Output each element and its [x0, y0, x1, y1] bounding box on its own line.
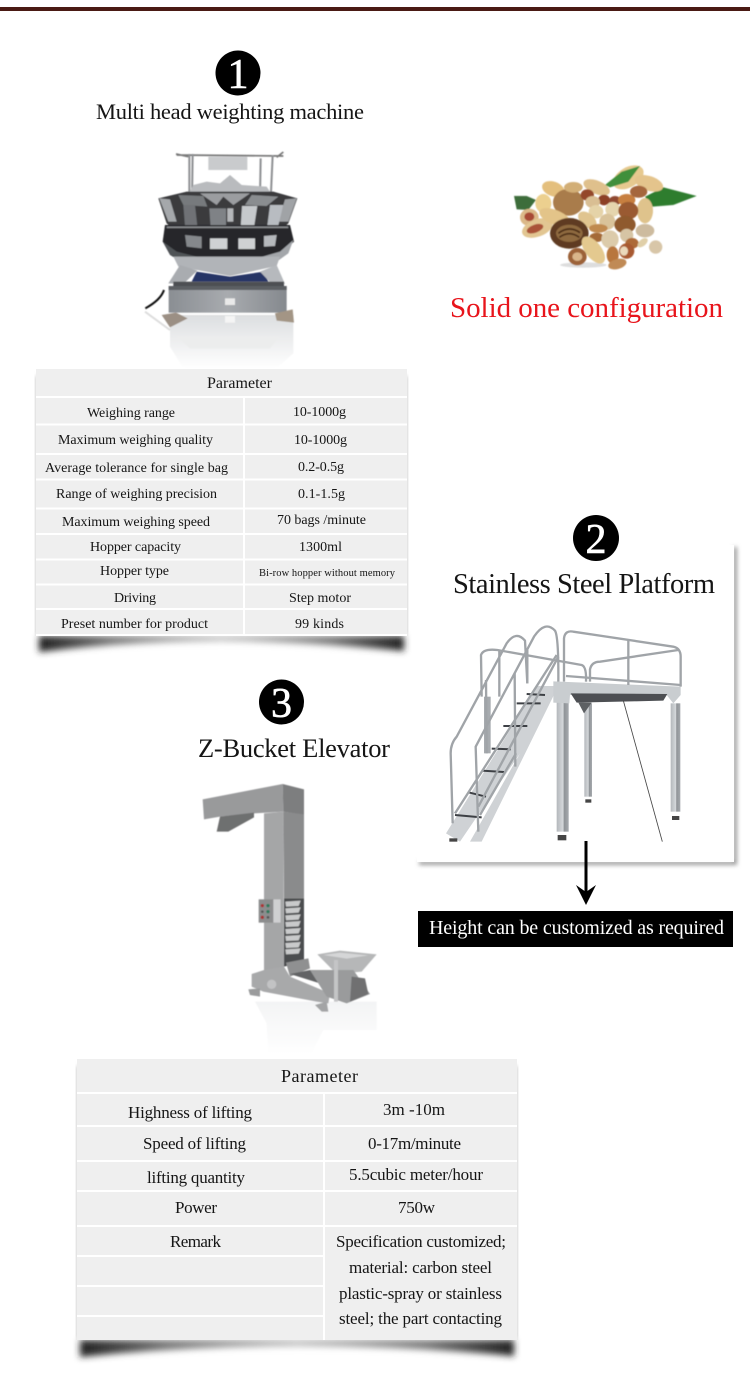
- table 2 values: material: carbon steel: [349, 1258, 492, 1277]
- table 2 values: 5.5cubic meter/hour: [349, 1165, 483, 1184]
- table 1 values: 10-1000g: [293, 405, 346, 420]
- table 2 shadow: [76, 1066, 518, 1357]
- table 1 labels: Maximum weighing speed: [62, 515, 210, 530]
- heading: z-bucket elevator: Z-Bucket Elevator: [198, 733, 390, 763]
- table 2 values: Specification customized;: [336, 1232, 506, 1251]
- table 2 heading: Parameter: [281, 1066, 358, 1086]
- table 2 values: [336, 1100, 506, 1328]
- table 2 values: 3m -10m: [383, 1100, 445, 1119]
- panel: parameter table 2: [77, 1059, 517, 1340]
- table 2 values: 750w: [398, 1198, 436, 1217]
- table 1 values: 70 bags /minute: [277, 513, 366, 528]
- table 1 heading: Parameter: [207, 375, 273, 392]
- table 2 labels: Speed of lifting: [143, 1134, 246, 1153]
- badge 1: 1: [228, 52, 248, 98]
- table 2 labels: Remark: [170, 1232, 222, 1251]
- table 1 values: 10-1000g: [294, 433, 347, 448]
- table 1 values: 1300ml: [299, 540, 342, 555]
- table 2 values: steel; the part contacting: [339, 1309, 502, 1328]
- badge 1: [216, 50, 260, 98]
- table 1 values: Bi-row hopper without memory: [259, 568, 396, 579]
- heading: stainless steel platform: Stainless Steel Platform: [453, 569, 715, 600]
- table 2 values: plastic-spray or stainless: [339, 1284, 502, 1303]
- table 1 values: [259, 405, 396, 632]
- image: multi head weigher: [145, 152, 297, 368]
- table 1 values: 0.1-1.5g: [298, 487, 345, 502]
- table 2 labels: lifting quantity: [147, 1168, 246, 1187]
- callout: solid one configuration: Solid one configuration: [450, 292, 724, 324]
- panel: platform frame shadow: [417, 545, 735, 863]
- image: stainless steel platform: [446, 627, 681, 842]
- callout: height can be customized: Height can be customized as required: [429, 917, 724, 939]
- table 1 labels: Maximum weighing quality: [58, 433, 213, 448]
- table 1 labels: Preset number for product: [61, 617, 208, 632]
- table 2 labels: Highness of lifting: [128, 1103, 252, 1122]
- badge 3: [259, 680, 304, 727]
- table 1 labels: Average tolerance for single bag: [45, 461, 228, 476]
- table 1 labels: Hopper type: [100, 564, 169, 579]
- table 1 labels: Range of weighing precision: [56, 487, 217, 502]
- table 1 labels: Weighing range: [87, 406, 175, 421]
- table 2 labels: Power: [175, 1198, 217, 1217]
- badge 2: 2: [586, 517, 606, 563]
- table 2 values: 0-17m/minute: [368, 1134, 461, 1153]
- badge 3: 3: [271, 681, 292, 727]
- panel: parameter table 1: [36, 369, 407, 636]
- table 1 labels: Hopper capacity: [90, 540, 181, 555]
- table 1 values: 99 kinds: [295, 617, 344, 632]
- callout: height can be customized: [418, 911, 733, 947]
- table 1 labels: [45, 406, 228, 632]
- table 1 shadow: [35, 376, 408, 652]
- arrow: height indicator: [576, 841, 596, 905]
- badge 2: [573, 515, 619, 563]
- image: z-bucket elevator: [203, 784, 377, 1057]
- table 1 labels: Driving: [114, 591, 156, 606]
- table 1 values: Step motor: [289, 591, 351, 606]
- table 1 values: 0.2-0.5g: [298, 460, 344, 475]
- image: mixed nuts: [514, 160, 697, 271]
- top bar: [0, 7, 750, 11]
- heading: multi head weighting machine: Multi head weighting machine: [96, 99, 364, 124]
- table 2 labels: [128, 1103, 252, 1251]
